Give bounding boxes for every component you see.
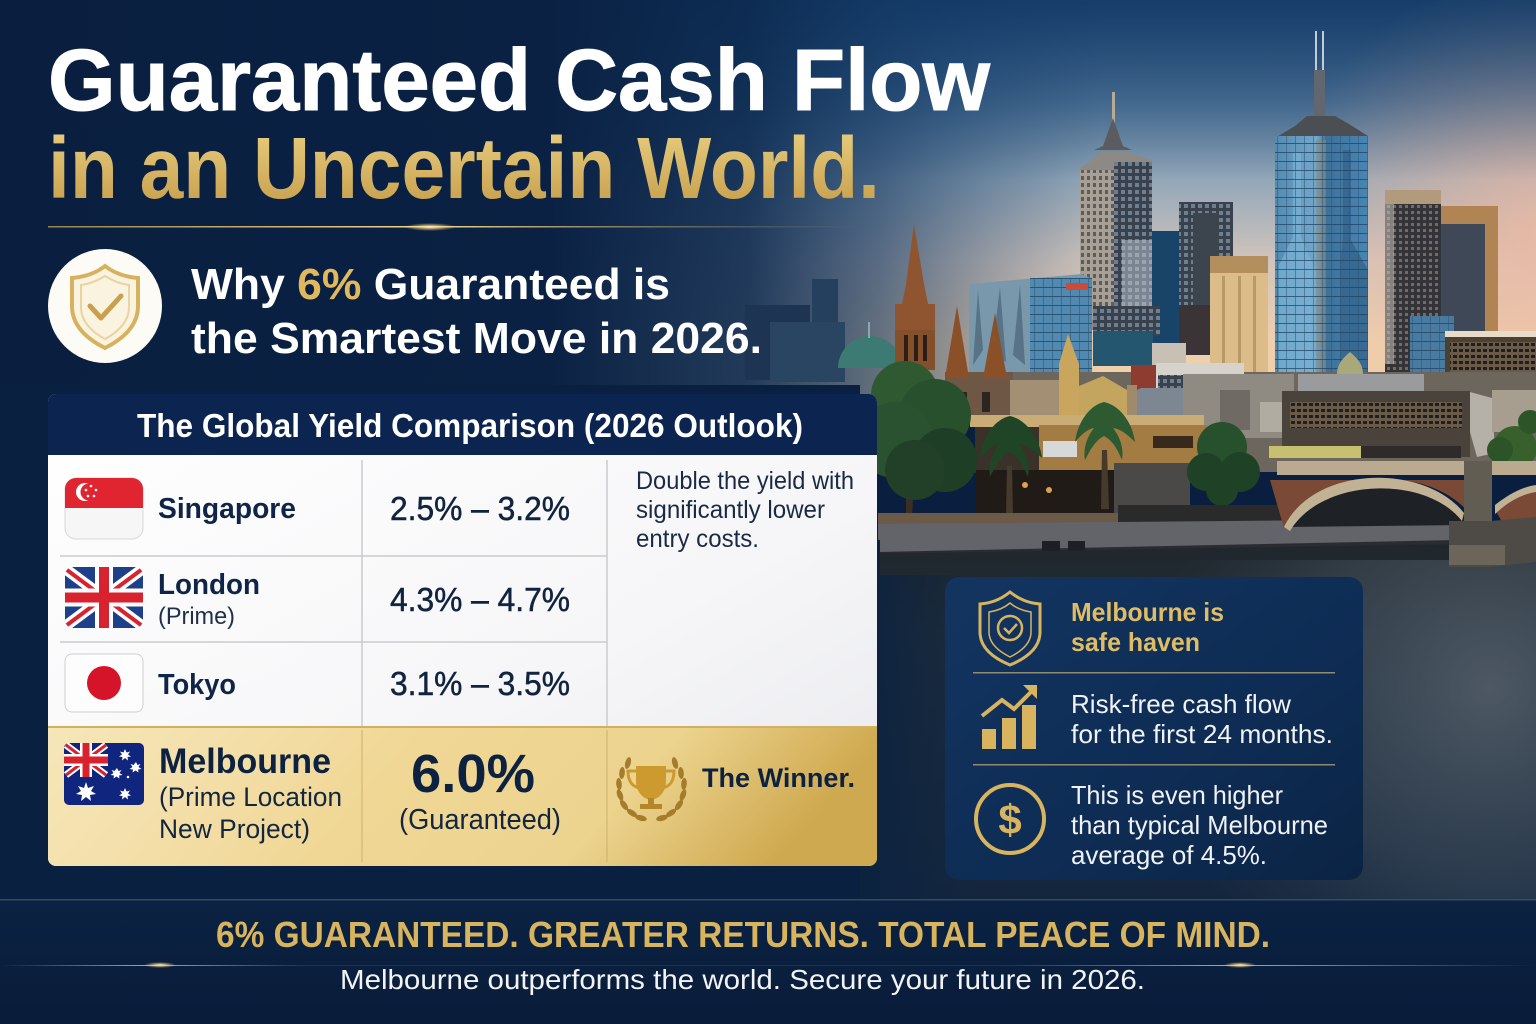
subtitle: Why 6% Guaranteed is xyxy=(191,260,670,309)
cash flow text xyxy=(1071,689,1333,749)
row: Melbourne winner: The Winner. xyxy=(702,763,855,793)
footer headline: 6% GUARANTEED. GREATER RETURNS. TOTAL PEACE OF MIND. xyxy=(216,914,1270,955)
icon: UK flag xyxy=(65,567,143,628)
Eureka tower xyxy=(1275,31,1368,382)
subtitle xyxy=(191,260,762,363)
icon: Japan flag xyxy=(65,654,143,712)
left navy base xyxy=(0,385,880,905)
row: Singapore: Singapore xyxy=(158,493,296,525)
row: London xyxy=(65,567,570,630)
icon: growth chart xyxy=(982,685,1037,749)
row: Singapore xyxy=(65,478,570,539)
row: Melbourne winner: (Prime Location xyxy=(159,782,342,812)
row: Melbourne winner: New Project) xyxy=(159,814,310,844)
row: London: 4.3% – 4.7% xyxy=(390,581,570,618)
icon: shield xyxy=(980,592,1040,665)
safe haven text: safe haven xyxy=(1071,627,1200,657)
river xyxy=(860,544,1536,900)
trees xyxy=(857,361,1536,522)
row: Tokyo xyxy=(65,654,570,712)
Rialto tower xyxy=(1080,92,1160,336)
comparison note: entry costs. xyxy=(636,525,759,553)
bridge xyxy=(1270,461,1536,567)
title: Guaranteed Cash Flow xyxy=(48,32,990,129)
cash flow text: for the first 24 months. xyxy=(1071,719,1333,749)
icon: shield badge xyxy=(48,249,162,363)
low office block xyxy=(1445,331,1536,391)
icon: trophy with laurel xyxy=(615,756,688,822)
panel: global yield comparison table xyxy=(48,394,877,866)
row: Melbourne winner: 6.0% xyxy=(411,744,535,804)
palm trees xyxy=(980,402,1135,516)
station terrace and arcade xyxy=(970,415,1207,514)
background sky xyxy=(0,0,1536,420)
embankment xyxy=(878,505,1458,557)
comparison note: Double the yield with xyxy=(636,467,854,495)
panel: Melbourne benefits xyxy=(945,577,1363,880)
glass block xyxy=(969,274,1092,374)
yield comparison text: than typical Melbourne xyxy=(1071,810,1328,840)
right twin towers xyxy=(1385,190,1498,380)
row: Melbourne winner: Melbourne xyxy=(159,742,331,781)
footer tagline: Melbourne outperforms the world. Secure your future in 2026. xyxy=(340,964,1145,995)
cathedral xyxy=(895,224,1013,418)
title: in an Uncertain World. xyxy=(48,120,880,217)
row: Melbourne winner xyxy=(48,726,877,866)
icon: dollar coin xyxy=(976,785,1044,853)
distant faded buildings xyxy=(745,279,902,382)
glass tower right xyxy=(1410,316,1454,386)
row: Tokyo: 3.1% – 3.5% xyxy=(390,665,570,702)
city skyline photo xyxy=(745,31,1536,900)
yield comparison text: average of 4.5%. xyxy=(1071,840,1267,870)
icon: Singapore flag xyxy=(65,478,143,539)
gold divider xyxy=(48,223,860,231)
table header: The Global Yield Comparison (2026 Outlook) xyxy=(137,407,803,444)
footer band xyxy=(0,899,1536,1024)
cash flow text: Risk-free cash flow xyxy=(1071,689,1291,719)
row: London: London xyxy=(158,569,260,601)
row: Singapore: 2.5% – 3.2% xyxy=(390,490,570,527)
safe haven text: Melbourne is xyxy=(1071,597,1224,627)
central towers xyxy=(1152,202,1268,376)
row: London: (Prime) xyxy=(158,603,235,630)
icon: dollar coin: $ xyxy=(998,796,1022,843)
yield comparison text xyxy=(1071,780,1328,870)
row: Melbourne winner: (Guaranteed) xyxy=(399,804,561,836)
comparison note: significantly lower xyxy=(636,496,825,524)
arts precinct dark building xyxy=(1269,390,1536,458)
yield comparison text: This is even higher xyxy=(1071,780,1283,810)
safe haven text xyxy=(1071,597,1224,657)
title xyxy=(48,32,990,217)
table header xyxy=(48,394,877,455)
mid-rise city block xyxy=(1010,331,1536,472)
row: Tokyo: Tokyo xyxy=(158,669,236,701)
icon: Australian flag xyxy=(64,743,144,805)
comparison note xyxy=(636,467,854,553)
subtitle: the Smartest Move in 2026. xyxy=(191,314,762,363)
gothic and low-rise buildings xyxy=(1010,334,1137,417)
